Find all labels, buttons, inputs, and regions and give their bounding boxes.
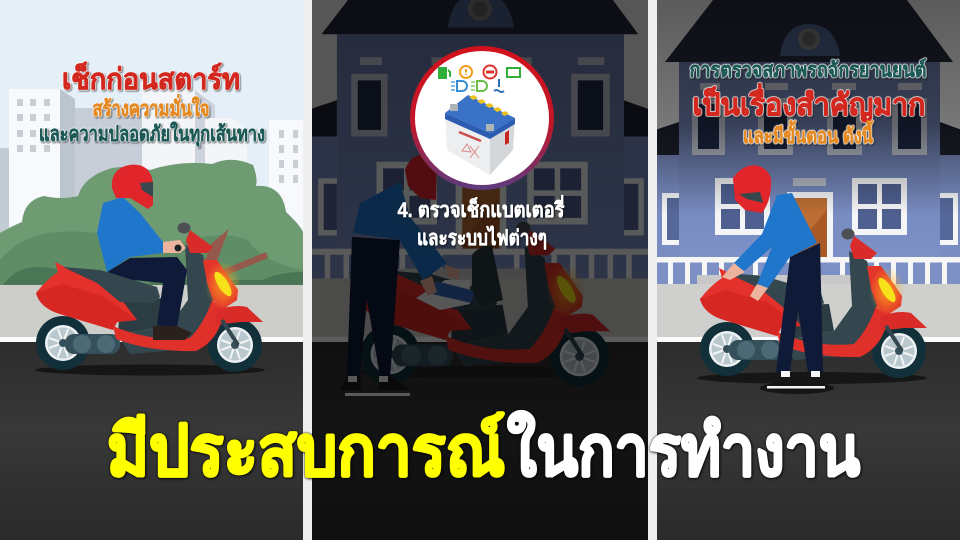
- panel: inspection scene: [655, 0, 960, 540]
- step caption: [398, 194, 565, 250]
- bush: [0, 160, 303, 290]
- person bending: [722, 165, 826, 388]
- top shade: [657, 0, 960, 215]
- scooter: [36, 222, 263, 372]
- mechanic: [340, 155, 460, 396]
- panel: battery check: [311, 0, 648, 540]
- sidewalk: [0, 285, 303, 337]
- road: [657, 342, 960, 540]
- heading: inspection is important: การตรวจสภาพรถจักรยานยนต์: [690, 58, 926, 82]
- heading: inspection is important: และมีขั้นตอน ดังนี้: [743, 120, 874, 148]
- panel: riding scene: [0, 0, 303, 540]
- dark overlay: [312, 0, 648, 540]
- heading: inspection is important: [690, 58, 926, 148]
- battery: [445, 95, 515, 175]
- step caption: และระบบไฟต่างๆ: [417, 225, 547, 250]
- headline: [107, 410, 860, 490]
- house background: [311, 0, 648, 342]
- headline: มีประสบการณ์: [107, 412, 505, 490]
- headline: ในการทำงาน: [507, 410, 860, 490]
- city buildings: [0, 89, 303, 233]
- scooter with open seat: [360, 222, 610, 386]
- step caption: 4. ตรวจเช็กแบตเตอรี่: [398, 194, 565, 222]
- title: start check: สร้างความมั่นใจ: [92, 93, 210, 121]
- warning light icons: [439, 66, 520, 92]
- house background: [655, 0, 960, 342]
- title: start check: [39, 61, 265, 148]
- scooter: [700, 228, 927, 378]
- circle icon: battery and warning lights: [410, 46, 554, 190]
- title: start check: เช็กก่อนสตาร์ท: [62, 61, 240, 96]
- heading: inspection is important: เป็นเรื่องสำคัญมาก: [692, 83, 926, 123]
- road: [0, 342, 303, 540]
- title: start check: และความปลอดภัยในทุกเส้นทาง: [39, 121, 265, 148]
- rider: [97, 165, 192, 340]
